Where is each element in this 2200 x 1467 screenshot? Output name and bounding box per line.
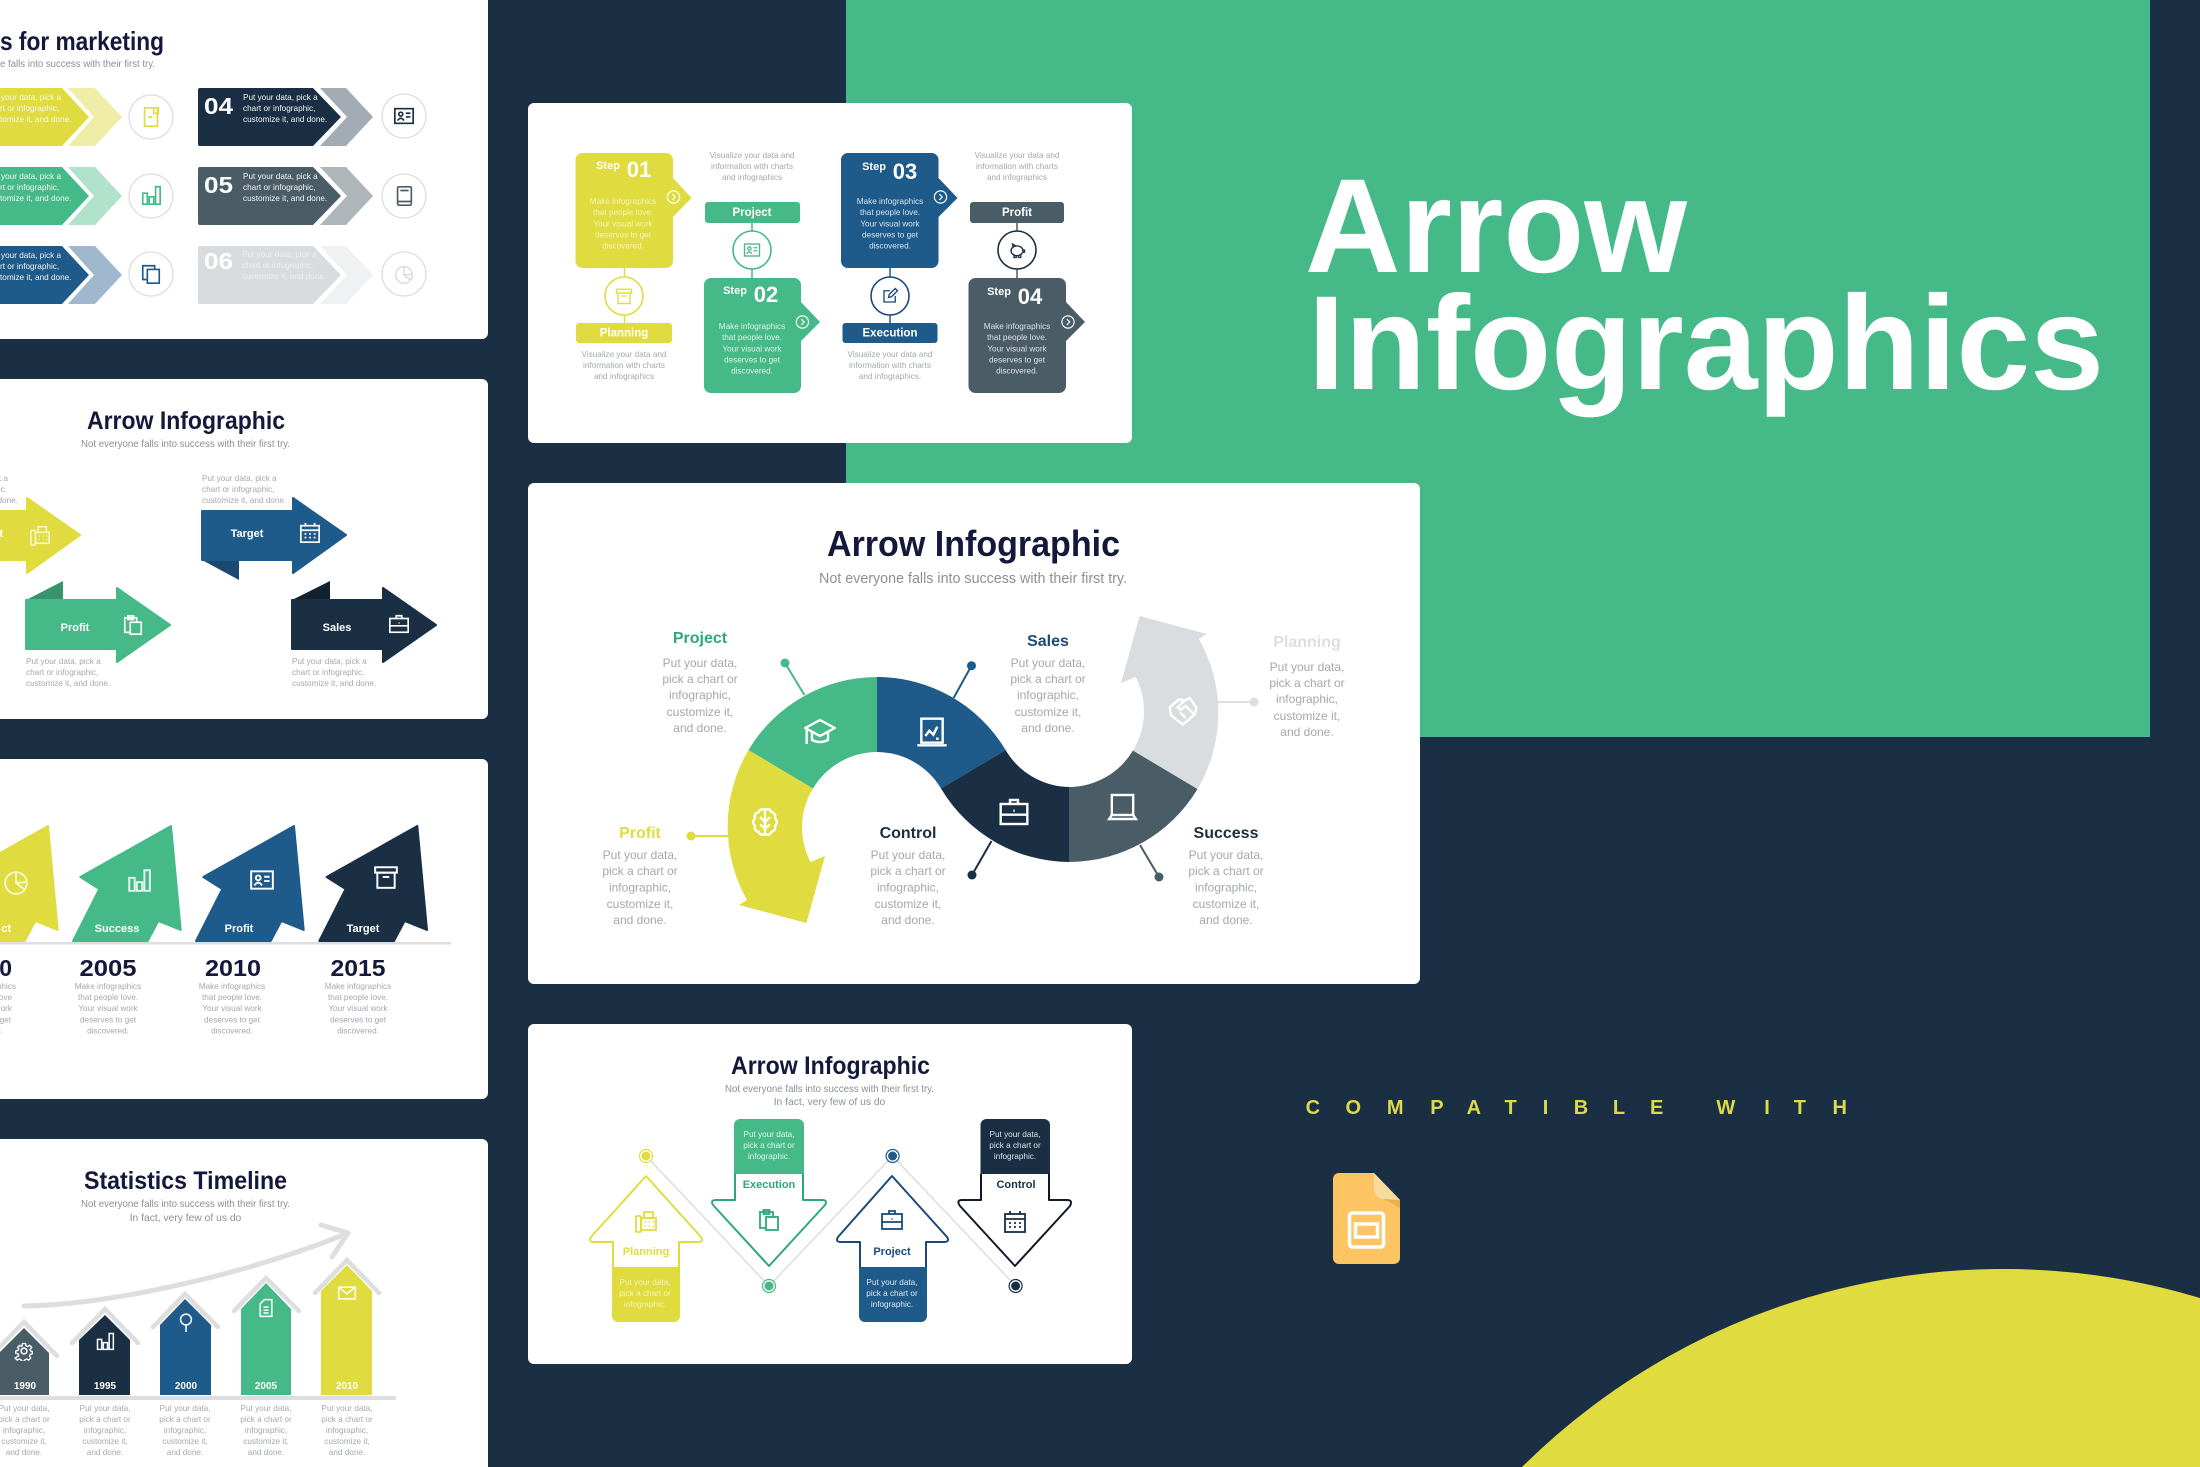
- year column: 2005: Make infographics: [75, 982, 141, 991]
- text: profit note: information with charts: [976, 162, 1058, 171]
- label: project: [662, 630, 738, 735]
- arrow: project: infographic.: [871, 1300, 913, 1309]
- arrow row: 04: chart or infographic,: [243, 104, 315, 113]
- subheading: Not everyone falls into success with their first try.: [81, 1199, 290, 1210]
- icon: copies: [143, 266, 159, 283]
- label: sales: customize it,: [1015, 705, 1081, 719]
- year column: 2005: Your visual work: [78, 1004, 139, 1013]
- heading: Arrow Infographic: [827, 523, 1120, 564]
- label: success: [1188, 825, 1264, 927]
- yellow circle: [1522, 1269, 2200, 1467]
- label: profit: Put your data,: [603, 848, 677, 862]
- subheading: [725, 1084, 934, 1108]
- step 03 card: Your visual work: [860, 220, 921, 228]
- step 01 card: Your visual work: [593, 220, 654, 228]
- icon: handshake: [1170, 698, 1196, 725]
- text: sales: chart or infographic,: [292, 668, 364, 677]
- text: sales: customize it, and done.: [292, 679, 376, 688]
- arrow row: 05: [198, 167, 373, 225]
- text: profit: [26, 657, 110, 688]
- arrow row: 06: customize it, and done.: [242, 272, 326, 281]
- year column: 2005: deserves to get: [80, 1016, 137, 1024]
- text: 2005: Put your data,: [241, 1404, 291, 1413]
- arrow row: 06: chart or infographic,: [242, 261, 314, 270]
- label: success: pick a chart or: [1188, 864, 1264, 878]
- text: 1990: infographic,: [3, 1426, 45, 1435]
- label: profit: customize it,: [607, 897, 673, 911]
- text: 2010: infographic,: [326, 1426, 368, 1435]
- label: sales: Put your data,: [1011, 656, 1085, 670]
- step 02 card: Make infographics: [719, 322, 785, 331]
- arrow row: green: [0, 167, 122, 225]
- arrow segment: dark: [941, 750, 1069, 862]
- node: project: [705, 202, 800, 269]
- step 01 card: [576, 153, 692, 268]
- text: planning note: Visualize your data and: [582, 350, 667, 359]
- step 02 card: [704, 278, 820, 393]
- text: profit note: Visualize your data and: [975, 151, 1060, 160]
- year column: 2010: [199, 955, 265, 1036]
- arrow: control: [958, 1119, 1071, 1266]
- year column: 2015: deserves to get: [330, 1016, 387, 1024]
- text: 2005: [240, 1404, 292, 1457]
- step 02 card: 02: [754, 282, 778, 307]
- text: 1995: pick a chart or: [79, 1415, 131, 1424]
- text: execution note: Visualize your data and: [848, 350, 933, 359]
- year column: 2015: that people love.: [328, 993, 388, 1002]
- icon: briefcase: [1001, 800, 1027, 824]
- label: planning: infographic,: [1276, 692, 1338, 706]
- year column: 2015: Make infographics: [325, 982, 391, 991]
- label: success: Put your data,: [1189, 848, 1263, 862]
- icon: brain: [753, 809, 777, 835]
- arrow: project: Put your data,: [867, 1278, 917, 1287]
- dark arrow: [292, 581, 436, 662]
- text: 2000: infographic,: [164, 1426, 206, 1435]
- year column: 2010: discovered.: [211, 1026, 253, 1036]
- text: 2010: pick a chart or: [321, 1415, 373, 1424]
- node: profit: Profit: [1002, 207, 1032, 219]
- text: planning note: information with charts: [583, 361, 665, 370]
- partial year column: [0, 955, 16, 1036]
- yellow arrow: [0, 826, 58, 941]
- label: project: Project: [673, 630, 728, 647]
- step 04 card: deserves to get: [989, 356, 1046, 364]
- text: 2000: Put your data,: [160, 1404, 210, 1413]
- text: project note: and infographics: [722, 173, 782, 182]
- text: execution note: and infographics.: [859, 372, 921, 381]
- panel: outlined arrows: [528, 1024, 1132, 1364]
- label: sales: infographic,: [1017, 688, 1079, 702]
- arrow: execution: infographic.: [748, 1152, 790, 1161]
- label: project: Put your data,: [663, 656, 737, 670]
- step 02 card: that people love.: [722, 333, 782, 342]
- arrow row: green: your data, pick a: [1, 172, 62, 181]
- step 04 card: discovered.: [996, 366, 1038, 376]
- arrow row: 04: Put your data, pick a: [243, 93, 318, 102]
- blue arrow: [202, 498, 346, 580]
- house: 1995: 1995: [94, 1381, 117, 1392]
- base line: [0, 1396, 396, 1400]
- arrow row: 05: Put your data, pick a: [243, 172, 318, 181]
- text: 2010: customize it,: [324, 1437, 370, 1446]
- house: 2000: 2000: [175, 1381, 198, 1392]
- text: 2005: customize it,: [243, 1437, 289, 1446]
- arrow row: 05: customize it, and done.: [243, 194, 327, 203]
- step 03 card: that people love.: [860, 208, 920, 217]
- arrow row: 04: 04: [204, 93, 233, 119]
- label: sales: Sales: [1027, 633, 1069, 650]
- connectors: [624, 223, 1017, 323]
- label: project: pick a chart or: [662, 672, 738, 686]
- text: 2000: [159, 1404, 211, 1457]
- text: 1995: Put your data,: [80, 1404, 130, 1413]
- label: control: infographic,: [877, 880, 939, 894]
- arrow: growth curve: [24, 1225, 348, 1306]
- text: profit: customize it, and done.: [26, 679, 110, 688]
- year column: 2010: that people love.: [202, 993, 262, 1002]
- label: planning: customize it,: [1274, 709, 1340, 723]
- step 04 card: 04: [1018, 284, 1043, 309]
- heading: Statistics Timeline: [84, 1167, 287, 1195]
- label: sales: and done.: [1021, 721, 1075, 735]
- partial year column: ork: [1, 1004, 13, 1013]
- year column: 2005: [75, 955, 141, 1036]
- text: profit: chart or infographic,: [26, 668, 98, 677]
- subheading: [81, 1199, 290, 1224]
- arrow row: 04: customize it, and done.: [243, 115, 327, 124]
- icon: id card: [395, 109, 413, 123]
- arrow row: yellow: your data, pick a: [1, 93, 62, 102]
- text: planning note: [582, 350, 667, 381]
- text: execution note: [848, 350, 933, 381]
- heading: s for marketing: [0, 26, 164, 56]
- step 04 card: Make infographics: [984, 322, 1050, 331]
- label: profit: and done.: [613, 913, 667, 927]
- green arrow: Success: [95, 923, 139, 935]
- blue arrow: Profit: [225, 923, 254, 935]
- arrow: planning: pick a chart or: [619, 1289, 671, 1298]
- label: sales: [1010, 633, 1086, 735]
- text: 2010: Put your data,: [322, 1404, 372, 1413]
- subheading: Not everyone falls into success with their first try.: [819, 570, 1127, 587]
- arrow row: 06: 06: [204, 248, 233, 274]
- arrow segment: gray: [1121, 616, 1218, 789]
- year column: 2005: discovered.: [87, 1026, 129, 1036]
- arrow row: yellow: tomize it, and done.: [0, 115, 71, 124]
- step 01 card: Make infographics: [590, 197, 656, 206]
- house: 1990: 1990: [14, 1381, 37, 1392]
- arrow row: blue: rt or infographic,: [0, 262, 59, 271]
- arrow row: yellow: rt or infographic,: [0, 104, 59, 113]
- step 03 card: 03: [893, 159, 917, 184]
- step 01 card: discovered.: [602, 242, 644, 250]
- arrow row: 06: [198, 246, 373, 304]
- label: project: and done.: [673, 721, 727, 735]
- label: control: Control: [880, 825, 936, 842]
- subheading: In fact, very few of us do: [774, 1097, 886, 1108]
- icon: notebook: [145, 108, 158, 126]
- text: 2005: infographic,: [245, 1426, 287, 1435]
- baseline: [0, 942, 451, 944]
- step 02 card: Step: [723, 285, 747, 297]
- node: planning: [576, 277, 672, 343]
- step 04 card: that people love.: [987, 333, 1047, 342]
- step 02 card: deserves to get: [724, 356, 781, 364]
- text: 2005: and done.: [248, 1448, 284, 1457]
- dark arrow: Target: [347, 923, 380, 935]
- yellow arrow: [0, 498, 80, 573]
- text: profit: Put your data, pick a: [26, 657, 101, 666]
- panel: statistics timeline: [0, 1139, 488, 1467]
- icon: book: [398, 187, 411, 205]
- blue arrow: Target: [231, 528, 264, 540]
- label: profit: Profit: [619, 825, 662, 842]
- arrow: execution: Put your data,: [744, 1130, 794, 1139]
- arrow: project: [837, 1176, 948, 1322]
- text: 1990: [0, 1404, 50, 1457]
- arrow: project: pick a chart or: [866, 1289, 918, 1298]
- year column: 2015: 2015: [330, 955, 386, 981]
- year column: 2015: Your visual work: [328, 1004, 389, 1013]
- text: 1990: and done.: [6, 1448, 42, 1457]
- arrow row: green: rt or infographic,: [0, 183, 59, 192]
- text: planning note: and infographics: [594, 372, 654, 381]
- text: target: customize it, and done.: [202, 496, 286, 505]
- icon: pie: [396, 267, 412, 283]
- text: profit note: and infographics: [987, 173, 1047, 182]
- subheading: e falls into success with their first try.: [0, 59, 155, 70]
- icon: slides file: [1333, 1173, 1400, 1264]
- step 04 card: [968, 278, 1085, 393]
- icon circles: [129, 94, 426, 296]
- arrow row: 05: chart or infographic,: [243, 183, 315, 192]
- label: planning: and done.: [1280, 725, 1334, 739]
- text: 1995: customize it,: [82, 1437, 128, 1446]
- text: 1990: customize it,: [1, 1437, 47, 1446]
- arrow row: blue: tomize it, and done.: [0, 273, 71, 282]
- year column: 2005: that people love.: [78, 993, 138, 1002]
- panel: S-curve arrow: [528, 483, 1420, 984]
- arrow: execution: pick a chart or: [743, 1141, 795, 1150]
- text: 1995: [79, 1404, 131, 1457]
- subheading: In fact, very few of us do: [130, 1213, 242, 1224]
- arrow row: green: tomize it, and done.: [0, 194, 71, 203]
- house: 2010: 2010: [336, 1381, 359, 1392]
- green arrow: [26, 581, 170, 662]
- label: profit: pick a chart or: [602, 864, 678, 878]
- arrow: control: infographic.: [994, 1152, 1036, 1161]
- year column: 2010: Your visual work: [202, 1004, 263, 1013]
- icon: bars: [143, 187, 160, 204]
- text: 2000: customize it,: [162, 1437, 208, 1446]
- house: 2000: [153, 1294, 218, 1395]
- step 01 card: deserves to get: [595, 230, 652, 240]
- label: profit: infographic,: [609, 880, 671, 894]
- label: planning: Put your data,: [1270, 660, 1344, 674]
- arrow row: blue: [0, 246, 122, 304]
- step 02 card: Your visual work: [722, 344, 783, 354]
- text: profit note: [975, 151, 1060, 182]
- panel: marketing arrows: [0, 0, 488, 339]
- icon: board: [917, 719, 947, 745]
- text: target: Put your data, pick a: [202, 474, 277, 483]
- arrow segment: blue: [877, 677, 1006, 788]
- arrow: execution: [712, 1119, 826, 1266]
- label: success: Success: [1194, 825, 1259, 842]
- year column: 2010: deserves to get: [204, 1016, 261, 1024]
- step 01 card: 01: [627, 157, 651, 182]
- blue arrow: [196, 826, 304, 941]
- compatible with label: COMPATIBLE WITH: [1306, 1097, 1847, 1119]
- text: target: chart or infographic,: [202, 485, 274, 494]
- year column: 2010: 2010: [205, 955, 261, 981]
- arrow row: 06: Put your data, pick a: [242, 250, 317, 259]
- node: profit: [970, 202, 1064, 269]
- text: sales: Put your data, pick a: [292, 657, 367, 666]
- text: 2000: and done.: [167, 1448, 203, 1457]
- arrow: control: Put your data,: [990, 1130, 1040, 1139]
- year column: 2015: discovered.: [337, 1026, 379, 1036]
- label: success: infographic,: [1195, 880, 1257, 894]
- label: project: infographic,: [669, 688, 731, 702]
- year column: 2010: Make infographics: [199, 982, 265, 991]
- text: sales: [292, 657, 376, 688]
- arrow segment: green: [748, 677, 877, 788]
- text: 2005: pick a chart or: [240, 1415, 292, 1424]
- label: control: Put your data,: [871, 848, 945, 862]
- arrow segment: yellow: [728, 750, 825, 923]
- node: planning: Planning: [600, 328, 648, 340]
- step 03 card: deserves to get: [862, 230, 919, 240]
- subheading: Not everyone falls into success with their first try.: [725, 1084, 934, 1095]
- arrow: control: pick a chart or: [989, 1141, 1041, 1150]
- house: 2005: 2005: [255, 1381, 278, 1392]
- dark arrow: [319, 826, 427, 941]
- house: 1995: [72, 1309, 138, 1395]
- connecting zigzag: [646, 1156, 1016, 1286]
- arrow row: 05: 05: [204, 172, 233, 198]
- label: success: customize it,: [1193, 897, 1259, 911]
- house: 2005: [234, 1278, 299, 1395]
- step 02 card: discovered.: [731, 366, 773, 376]
- step 01 card: that people love.: [593, 208, 653, 217]
- text: project note: Visualize your data and: [710, 151, 795, 160]
- label: profit: [602, 825, 678, 927]
- arrow row: yellow: [0, 88, 122, 146]
- house: 2010: [315, 1260, 379, 1395]
- text: 2010: and done.: [329, 1448, 365, 1457]
- text: 2010: [321, 1404, 373, 1457]
- step 03 card: discovered.: [869, 242, 911, 250]
- label: planning: [1269, 634, 1345, 739]
- heading: Arrow Infographic: [731, 1052, 930, 1080]
- icon: laptop: [1109, 795, 1136, 819]
- green arrow: [73, 826, 181, 941]
- text: project note: information with charts: [711, 162, 793, 171]
- text: project note: [710, 151, 795, 182]
- text: target: [202, 474, 286, 505]
- year column: 2015: [325, 955, 391, 1036]
- step 03 card: Step: [862, 161, 886, 173]
- connector dots: [640, 1150, 1022, 1292]
- label: project: customize it,: [667, 705, 733, 719]
- green arrow: Profit: [61, 622, 90, 634]
- pin lines: [691, 663, 1254, 877]
- node: execution: Execution: [863, 328, 917, 340]
- label: planning: Planning: [1273, 634, 1341, 651]
- text: 1990: Put your data,: [0, 1404, 49, 1413]
- heading: Arrow Infographic: [87, 407, 285, 435]
- text: 1995: infographic,: [84, 1426, 126, 1435]
- year column: 2005: 2005: [80, 955, 137, 981]
- arrow: planning: Planning: [623, 1246, 669, 1258]
- house: 1990: [0, 1322, 57, 1395]
- icon: graduation cap: [805, 720, 835, 744]
- yellow arrow: ct: [1, 923, 11, 935]
- text: 1995: and done.: [87, 1448, 123, 1457]
- main title: Arrow: [1305, 152, 1688, 301]
- arrow row: blue: your data, pick a: [1, 251, 62, 260]
- step 04 card: Your visual work: [987, 344, 1048, 354]
- label: planning: pick a chart or: [1269, 676, 1345, 690]
- arrow: control: Control: [996, 1179, 1036, 1191]
- step 04 card: Step: [987, 286, 1011, 298]
- green title block: [846, 0, 2150, 737]
- label: control: pick a chart or: [870, 864, 946, 878]
- label: sales: pick a chart or: [1010, 672, 1086, 686]
- main title: [1305, 152, 2104, 418]
- text: execution note: information with charts: [849, 361, 931, 370]
- panel: four steps: [528, 103, 1132, 443]
- label: control: customize it,: [875, 897, 941, 911]
- pin dots: [686, 658, 1258, 882]
- panel: folded arrows: [0, 379, 488, 719]
- arrow: planning: Put your data,: [620, 1278, 670, 1287]
- main title: Infographics: [1308, 269, 2104, 418]
- subheading: Not everyone falls into success with their first try.: [81, 439, 290, 450]
- step 01 card: Step: [596, 160, 620, 172]
- label: success: and done.: [1199, 913, 1253, 927]
- dark arrow: Sales: [323, 622, 351, 634]
- arrow: planning: [590, 1176, 702, 1322]
- panel: timeline arrows: [0, 759, 488, 1099]
- arrow: execution: Execution: [743, 1179, 796, 1191]
- partial note: [0, 474, 18, 505]
- step 03 card: [841, 153, 958, 268]
- node: execution: [842, 277, 938, 343]
- step 03 card: Make infographics: [857, 197, 923, 206]
- label: control: and done.: [881, 913, 935, 927]
- arrow: planning: infographic.: [624, 1300, 666, 1309]
- node: project: Project: [732, 207, 772, 219]
- arrow: project: Project: [873, 1246, 911, 1258]
- arrow segment: slate: [1069, 750, 1198, 862]
- label: control: [870, 825, 946, 927]
- text: 2000: pick a chart or: [159, 1415, 211, 1424]
- arrow row: 04: [198, 88, 373, 146]
